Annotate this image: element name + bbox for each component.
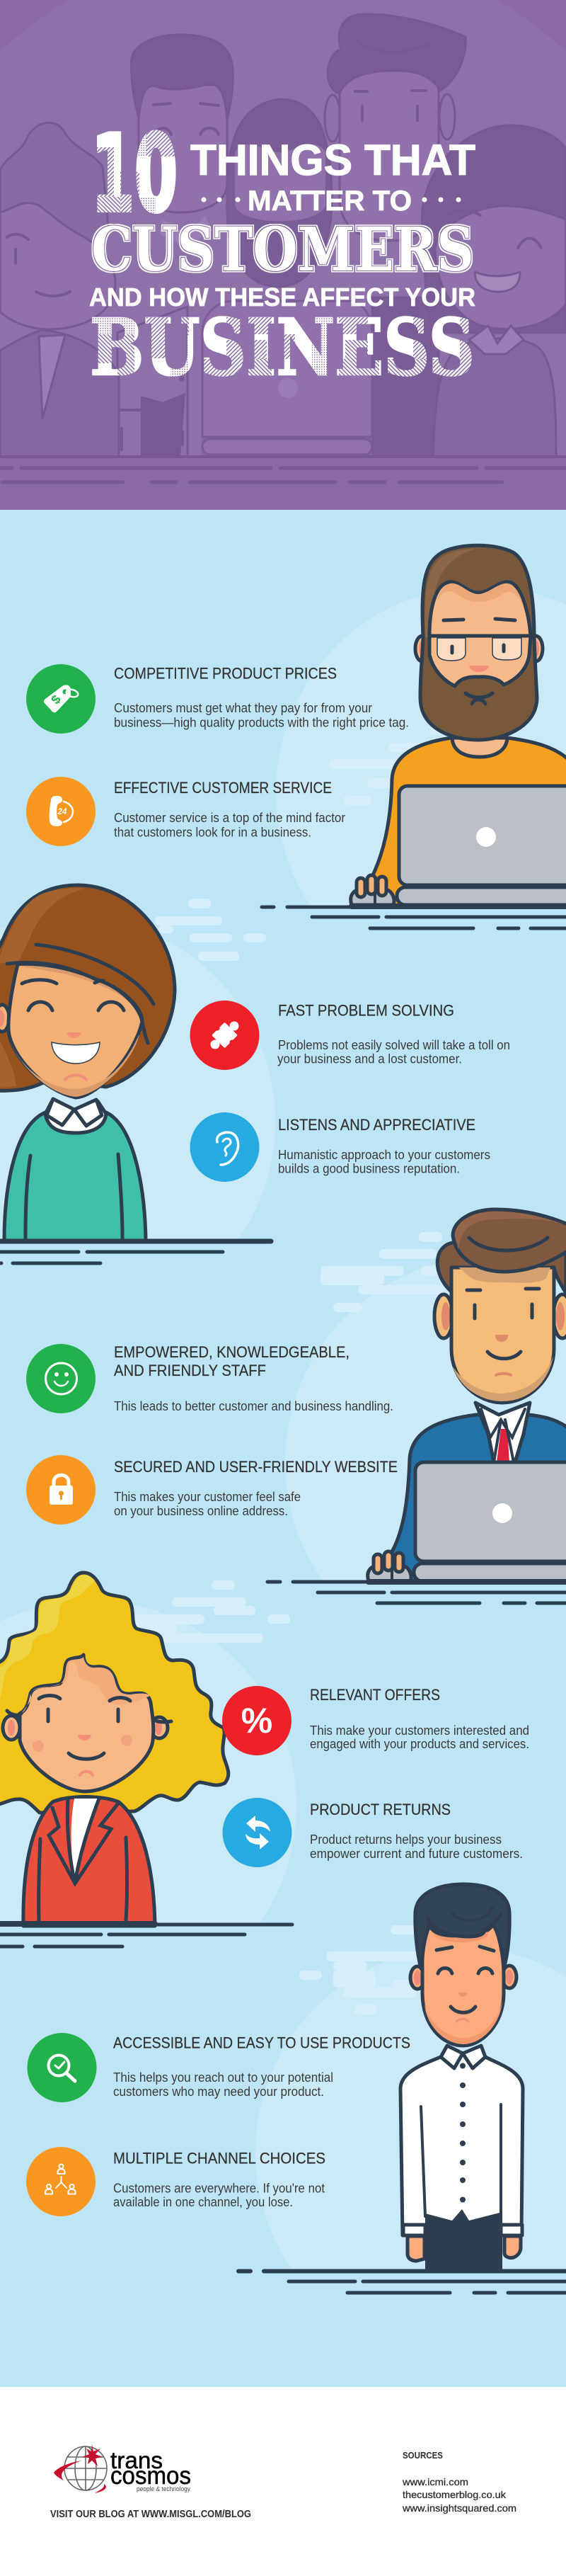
heading: AND FRIENDLY STAFF [114, 1362, 266, 1379]
item: effective customer service [26, 777, 345, 846]
hand [351, 875, 394, 905]
heading: EMPOWERED, KNOWLEDGEABLE, [114, 1343, 350, 1361]
text block: builds a good business reputation. [278, 1161, 460, 1175]
heading: FAST PROBLEM SOLVING [278, 1001, 454, 1020]
text block [278, 1148, 490, 1175]
text block [114, 811, 345, 840]
ground lines [238, 2272, 566, 2293]
logo text: trans [110, 2447, 163, 2473]
icon: percent [222, 1686, 291, 1755]
sources [402, 2450, 516, 2514]
text block: Problems not easily solved will take a toll on [278, 1038, 510, 1052]
item: product returns [222, 1798, 523, 1867]
title numeral 10: 10 [91, 113, 178, 236]
text block: business—high quality products with the right price tag. [114, 715, 409, 729]
item: empowered staff [26, 1343, 393, 1413]
page background [0, 510, 566, 2387]
heading: RELEVANT OFFERS [310, 1686, 440, 1704]
text block [113, 2070, 333, 2099]
ground lines [262, 906, 566, 928]
item: relevant offers [222, 1686, 529, 1755]
item: listens and appreciative [190, 1112, 490, 1182]
illustration: man in white shirt [400, 1884, 523, 2272]
title line: matter to: MATTER TO [248, 186, 412, 217]
illustration: woman in green [0, 885, 175, 1241]
text block: empower current and future customers. [310, 1847, 523, 1861]
title line: customers: CUSTOMERS [91, 215, 474, 285]
illustration: bearded man with laptop [351, 545, 566, 906]
illustration: curly haired woman [0, 1573, 229, 1926]
illustration: man in blue suit with laptop [368, 1209, 566, 1582]
title dots left [201, 197, 241, 203]
text block: your business and a lost customer. [277, 1052, 462, 1066]
sources: www.insightsquared.com [402, 2502, 516, 2514]
sources: SOURCES [403, 2450, 443, 2461]
text block [310, 1833, 523, 1861]
header figure: bearded man in centre [202, 99, 372, 457]
icon: 24 hour phone: 24 [57, 808, 67, 816]
section 1: bearded man [260, 544, 566, 930]
icon: percent: % [241, 1701, 272, 1740]
text block: Product returns helps your business [310, 1833, 502, 1847]
icon: red swoosh [54, 2444, 106, 2493]
section 5: man in white shirt [236, 1882, 566, 2294]
heading: EFFECTIVE CUSTOMER SERVICE [114, 779, 332, 797]
heading: ACCESSIBLE AND EASY TO USE PRODUCTS [113, 2034, 410, 2052]
hand [368, 1551, 411, 1581]
ground lines [0, 1924, 292, 1947]
header panel [0, 0, 566, 510]
icon: magnifier with tick [27, 2033, 96, 2102]
logo: trans cosmos: people & technology [137, 2485, 190, 2493]
icon: ear [190, 1112, 259, 1182]
text block: on your business online address. [114, 1504, 288, 1518]
clouds [320, 1232, 444, 1312]
icon: globe [64, 2446, 107, 2490]
item: multiple channel choices [26, 2147, 325, 2216]
text block: Customer service is a top of the mind factor [114, 811, 345, 825]
item: fast problem solving [190, 1001, 510, 1070]
text block: Customers are everywhere. If you're not [113, 2181, 325, 2195]
item: accessible products [27, 2033, 410, 2102]
heading: PRODUCT RETURNS [310, 1801, 451, 1818]
sources: thecustomerblog.co.uk [403, 2489, 507, 2500]
section 3: man in blue suit [266, 1208, 566, 1605]
icon: return arrows [222, 1798, 291, 1867]
text block: available in one channel, you lose. [113, 2195, 293, 2209]
text block [113, 2181, 325, 2209]
title dots right [422, 197, 461, 203]
title line: and how these affect your: AND HOW THESE AFFECT YOUR [89, 283, 475, 312]
text block: engaged with your products and services. [310, 1737, 529, 1751]
header figure: curly haired woman on left [0, 122, 119, 457]
heading: LISTENS AND APPRECIATIVE [278, 1116, 475, 1134]
section 2: woman in green [0, 884, 275, 1265]
clouds [134, 1580, 290, 1643]
icon: puzzle piece [190, 1001, 259, 1070]
title line: things that: THINGS THAT [190, 136, 475, 184]
heading: SECURED AND USER-FRIENDLY WEBSITE [114, 1458, 398, 1476]
heading: COMPETITIVE PRODUCT PRICES [114, 664, 337, 683]
text block: This helps you reach out to your potential [113, 2070, 333, 2085]
heading: MULTIPLE CHANNEL CHOICES [113, 2150, 325, 2167]
section 4: curly haired woman [0, 1571, 296, 1949]
header figure: man at back left [117, 35, 233, 457]
clouds [330, 726, 472, 805]
icon: 24 hour phone [26, 777, 96, 846]
header figure: man at back right [325, 14, 466, 457]
text block: This makes your customer feel safe [114, 1490, 301, 1504]
title line: business: BUSINESS [90, 302, 475, 393]
footer panel [0, 2387, 566, 2576]
header laptop [156, 301, 372, 455]
text block: that customers look for in a business. [114, 826, 311, 840]
ground lines [0, 1241, 271, 1263]
logo: trans cosmos: cosmos [110, 2462, 191, 2490]
text block: customers who may need your product. [113, 2085, 324, 2099]
icon: padlock [26, 1455, 96, 1524]
item: secured website [26, 1455, 398, 1524]
text block: This leads to better customer and business handling. [114, 1399, 393, 1413]
clouds [299, 1925, 419, 2014]
icon: price tag [26, 664, 96, 734]
header floor lines [0, 457, 566, 482]
sources: www.icmi.com [402, 2476, 468, 2487]
text block [114, 701, 409, 729]
text block: This make your customers interested and [310, 1723, 529, 1738]
logo: trans cosmos [54, 2444, 191, 2493]
item: competitive product prices [26, 664, 409, 734]
ground lines [267, 1582, 566, 1603]
header figure: laughing woman on right [422, 125, 566, 457]
text block: Customers must get what they pay for from your [114, 701, 372, 715]
icon: smiley [26, 1344, 96, 1413]
blog link: VISIT OUR BLOG AT WWW.MISGL.COM/BLOG [50, 2509, 251, 2520]
title [89, 113, 475, 393]
heading [114, 1343, 350, 1379]
text block [277, 1038, 510, 1066]
text block [310, 1723, 529, 1751]
clouds [155, 899, 266, 961]
icon: connected people [26, 2147, 96, 2216]
icon: price tag: $ [48, 693, 64, 707]
text block [114, 1490, 301, 1518]
text block: Humanistic approach to your customers [278, 1148, 490, 1162]
